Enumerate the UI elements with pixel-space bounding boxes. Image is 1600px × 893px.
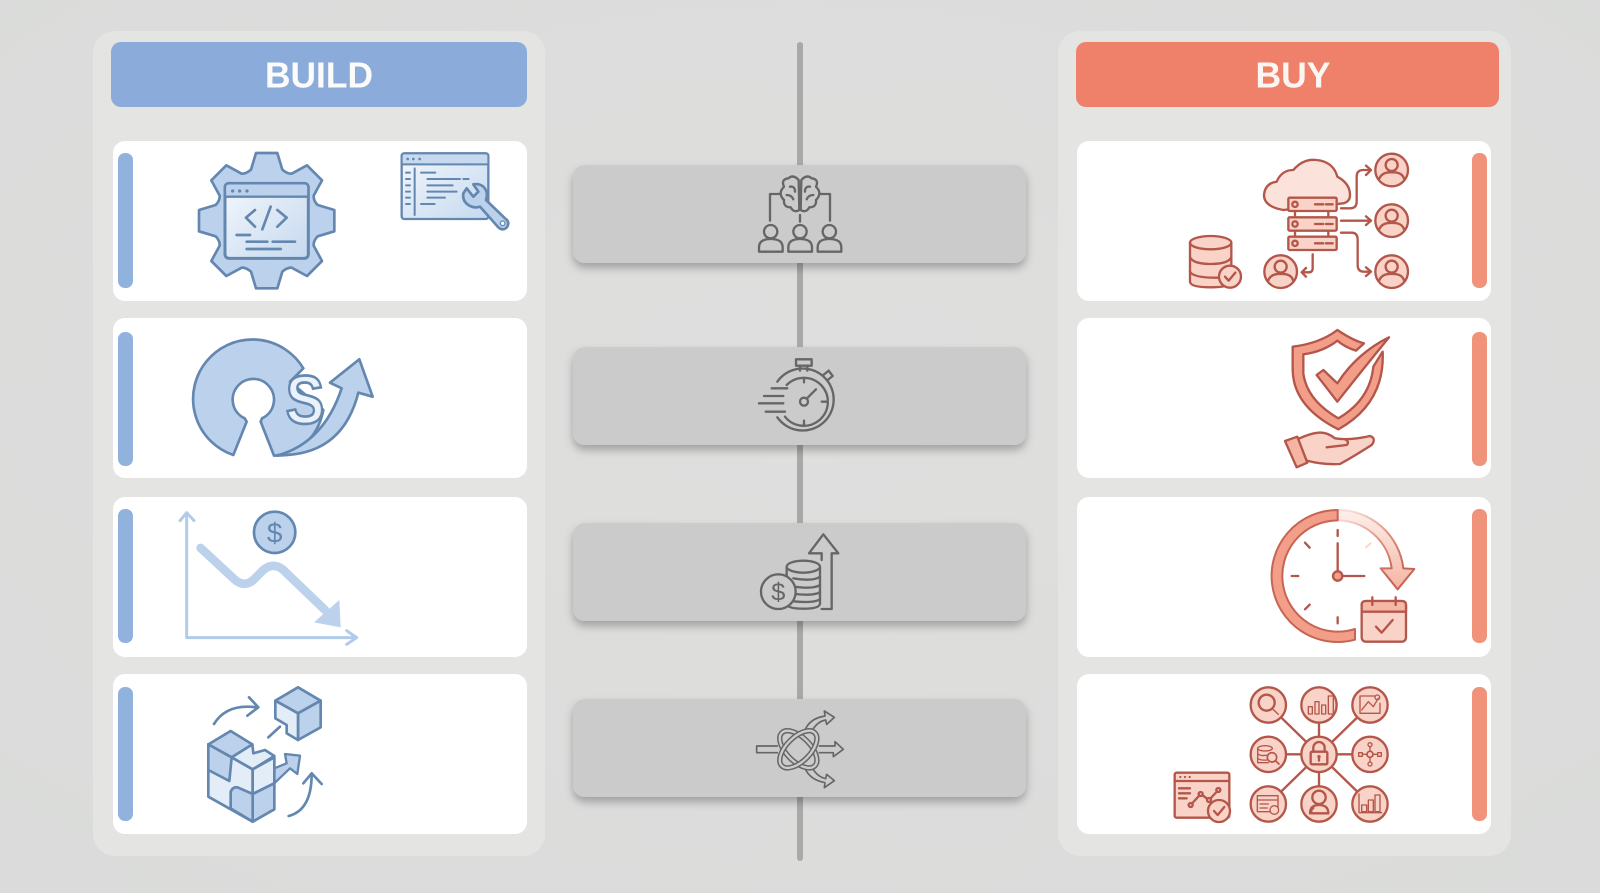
icon: dashboard window with check [1175,773,1230,822]
icon: clock with arrow and calendar [1272,510,1414,642]
card: build row 2 [113,318,527,478]
panel: buy column [1058,31,1511,856]
icon: shield, check and hand [1285,330,1389,467]
icon: knot with diverging arrows [757,711,843,788]
panel: center row 3 [573,523,1026,621]
card: buy row 3 [1077,497,1491,657]
icon: gear with code window [199,153,334,288]
heading: BUY [1076,42,1499,107]
icon: code window with wrench [402,153,508,229]
center spine line [797,42,803,861]
icon: hub of analytics nodes [1251,687,1388,822]
panel: center row 4 [573,699,1026,797]
panel: center row 1 [573,165,1026,263]
card: buy row 4 [1077,674,1491,834]
card: buy row 1 [1077,141,1491,301]
icon: falling cost chart [180,512,357,644]
icon: brain and team [759,177,841,252]
card: build row 4 [113,674,527,834]
card: build row 1 [113,141,527,301]
heading: BUY: BUY [1256,54,1330,96]
icon: database with check [1190,236,1241,288]
icon: modular cubes [208,687,322,822]
icon: falling cost chart: $ [267,517,283,548]
icon: coins with up arrow: $ [771,579,785,607]
card: build row 3 [113,497,527,657]
icon: open source logo with rising arrow [193,339,373,456]
card: buy row 2 [1077,318,1491,478]
icon: coins with up arrow [761,534,838,609]
icon: open source logo with rising arrow: S [286,363,324,439]
heading: BUILD: BUILD [265,54,373,96]
icon: cloud servers and users [1264,154,1408,288]
panel: build column [93,31,545,856]
icon: stopwatch [759,359,834,430]
heading: BUILD [111,42,527,107]
panel: center row 2 [573,347,1026,445]
